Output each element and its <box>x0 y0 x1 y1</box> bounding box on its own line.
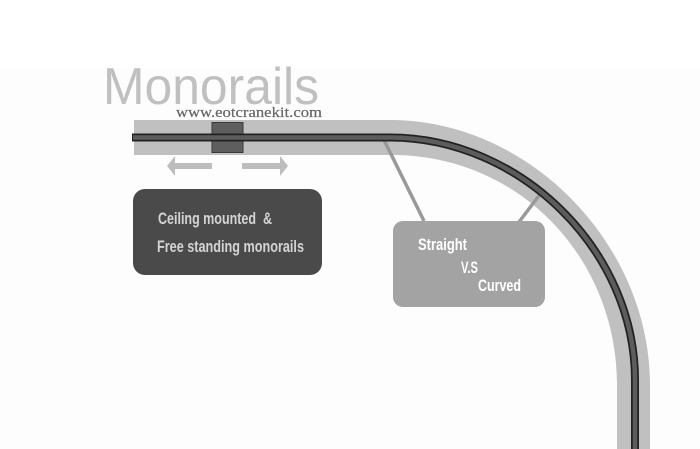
panel: straight vs curved <box>393 221 545 307</box>
label straight: Straight <box>418 235 467 254</box>
panel: ceiling mounted and free standing <box>133 189 322 275</box>
panel text line 2: Free standing monorails <box>157 237 304 256</box>
panel text line 1: Ceiling mounted & <box>158 209 272 228</box>
left arrow <box>167 156 212 176</box>
label curved: Curved <box>478 276 521 295</box>
website url: www.eotcranekit.com <box>176 105 322 121</box>
right arrow <box>242 156 288 176</box>
monorail beam <box>132 138 635 449</box>
trolley <box>212 122 243 152</box>
title: Monorails <box>103 58 319 116</box>
rail track band <box>134 120 650 449</box>
connector lines <box>384 140 541 222</box>
label v.s: V.S <box>461 258 478 277</box>
